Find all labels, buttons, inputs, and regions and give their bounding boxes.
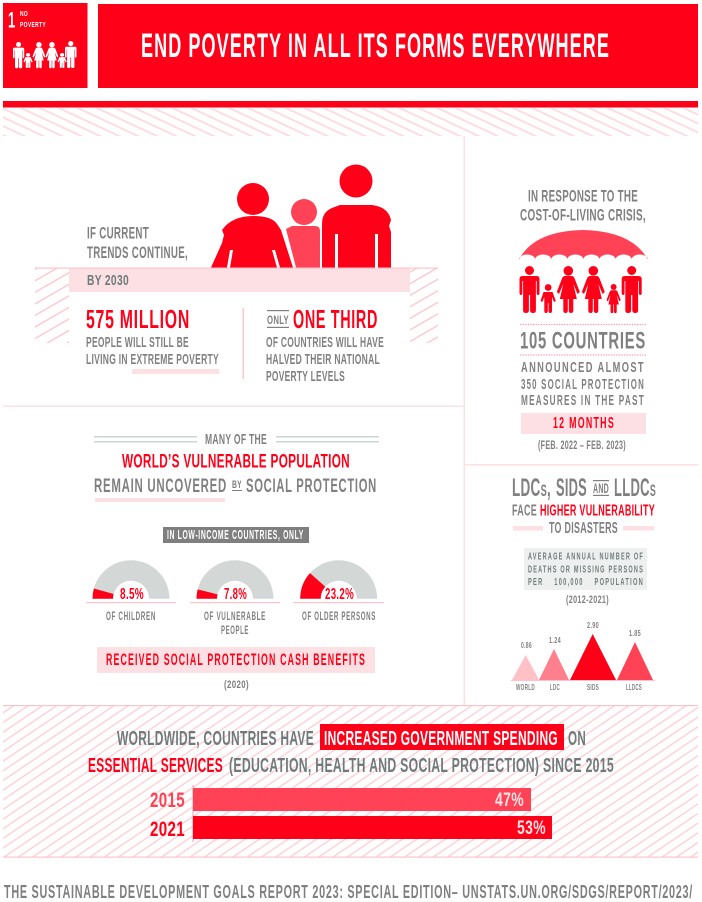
spending statement: ESSENTIAL SERVICES	[88, 755, 223, 777]
stat: one third	[266, 304, 384, 385]
gauge: older persons 23.2%: OF OLDER PERSONS	[302, 611, 376, 623]
bar chart: 2015	[150, 789, 185, 812]
announcement text	[521, 360, 645, 409]
stat: 575 million: PEOPLE WILL STILL BE	[86, 334, 189, 351]
gauge: vulnerable people 7.8%: PEOPLE	[221, 625, 249, 637]
lead text: IF CURRENT	[87, 224, 149, 242]
stat: one third: HALVED THEIR NATIONAL	[266, 351, 380, 368]
spending statement: WORLDWIDE, COUNTRIES HAVE	[117, 728, 314, 750]
year: (2020)	[224, 679, 249, 691]
triangle chart: 1.24	[549, 635, 561, 645]
date range: (FEB. 2022 – FEB. 2023)	[538, 440, 626, 452]
heading	[512, 474, 656, 537]
triangle chart: SIDS	[587, 682, 599, 692]
SDG goal 1 badge: NO	[20, 11, 28, 18]
hatched background	[3, 705, 698, 858]
triangle chart: 2.90	[587, 620, 599, 630]
triangle chart: 0.86	[521, 640, 532, 650]
stat: one third: OF COUNTRIES WILL HAVE	[266, 334, 384, 351]
panel dividers	[3, 136, 698, 705]
header rule and hatched strip	[3, 101, 698, 136]
icon: family silhouette	[211, 164, 391, 268]
stat: 575 million: LIVING IN EXTREME POVERTY	[86, 351, 219, 368]
12 months band	[521, 413, 646, 434]
panel: poverty by 2030	[35, 164, 438, 385]
by 2030 band: BY 2030	[87, 272, 129, 289]
stat: 105 countries	[520, 324, 646, 355]
low-income label	[163, 527, 309, 543]
gauge: vulnerable people 7.8%: 7.8%	[224, 586, 247, 603]
gauge: vulnerable people 7.8%: OF VULNERABLE	[204, 611, 266, 623]
triangle chart: LDC	[550, 682, 560, 692]
stat: one third: ONE THIRD	[293, 304, 378, 334]
panel: social protection	[86, 431, 384, 691]
bar chart: 53%	[517, 818, 546, 839]
icon: umbrella	[519, 230, 648, 260]
period: (2012-2021)	[566, 594, 609, 606]
heading: SOCIAL PROTECTION	[246, 476, 377, 497]
heading: SIDS	[556, 474, 587, 502]
icon: family under umbrella	[520, 266, 642, 313]
heading: FACE	[512, 502, 537, 520]
panel: cost-of-living response	[519, 186, 648, 452]
spending statement	[88, 724, 614, 777]
cash benefits band: RECEIVED SOCIAL PROTECTION CASH BENEFITS	[106, 650, 366, 669]
triangle chart: WORLD	[516, 682, 535, 692]
lead text: TRENDS CONTINUE,	[87, 243, 188, 262]
triangle chart	[511, 620, 655, 692]
heading: REMAIN UNCOVERED	[94, 476, 227, 497]
stat: 575 million	[86, 304, 219, 374]
title banner	[98, 4, 698, 88]
heading: LLDCS	[614, 474, 656, 502]
stat: 575 million: 575 MILLION	[86, 304, 190, 334]
SDG goal 1 badge	[3, 3, 88, 88]
stat: one third: ONLY	[267, 313, 289, 327]
panel: disaster vulnerability	[511, 474, 656, 692]
heading: BY	[232, 479, 242, 491]
gauge: vulnerable people 7.8%	[190, 560, 280, 637]
lead text	[520, 186, 646, 224]
heading: LDCS,	[512, 474, 551, 502]
heading	[94, 431, 379, 502]
heading: AND	[593, 480, 609, 496]
by 2030 band	[35, 268, 438, 292]
panel: government spending	[3, 705, 698, 858]
SDG goal 1 badge: 1	[8, 8, 16, 32]
cash benefits band	[97, 647, 375, 673]
stat: one third: POVERTY LEVELS	[266, 368, 345, 385]
gauge: older persons 23.2%: 23.2%	[325, 586, 354, 603]
lead text	[87, 224, 188, 262]
low-income label: IN LOW-INCOME COUNTRIES, ONLY	[167, 528, 304, 542]
triangle chart: 1.85	[629, 628, 641, 638]
triangle chart: LLDCS	[626, 682, 642, 692]
hatched side blocks	[35, 268, 438, 343]
gauge: children 8.5%: 8.5%	[120, 586, 144, 603]
12 months band: 12 MONTHS	[553, 415, 615, 432]
gauge: older persons 23.2%	[293, 560, 384, 623]
spending statement: ON	[568, 728, 586, 750]
bar chart: 2021	[150, 818, 185, 841]
gauge: children 8.5%: OF CHILDREN	[106, 611, 156, 623]
heading: MANY OF THE	[205, 431, 267, 448]
heading: WORLD’S VULNERABLE POPULATION	[122, 452, 350, 472]
bar chart	[150, 785, 552, 842]
heading: TO DISASTERS	[549, 520, 618, 537]
gauge: children 8.5%	[86, 560, 176, 623]
bar chart: 47%	[495, 790, 524, 811]
SDG goal 1 badge: POVERTY	[20, 22, 46, 29]
metric description	[524, 548, 647, 590]
